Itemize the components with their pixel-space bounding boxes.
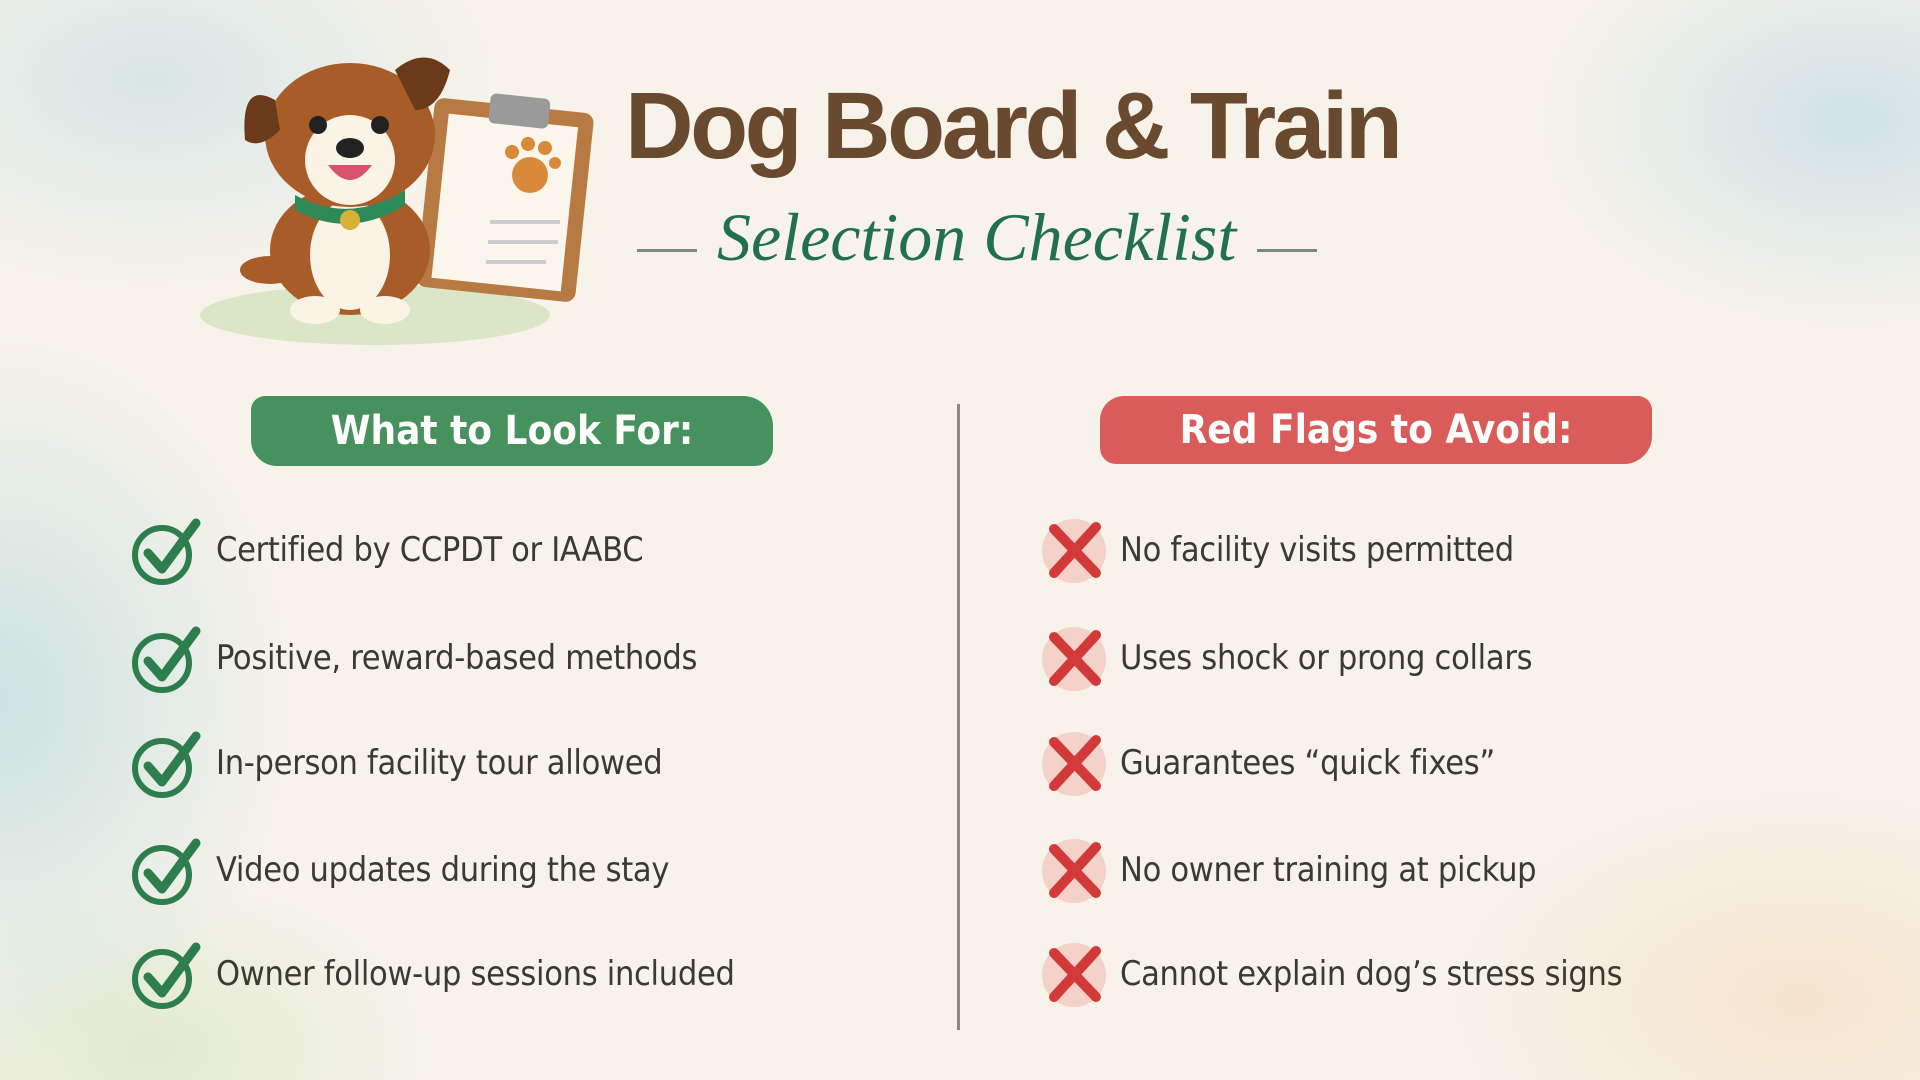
check item 5 [132, 942, 735, 1009]
check item 3 [132, 732, 662, 798]
x item 4 [1042, 839, 1536, 903]
x item 4: No owner training at pickup [1120, 850, 1536, 890]
x item 3 [1042, 732, 1495, 796]
red banner: Red Flags: Red Flags to Avoid: [1180, 407, 1572, 453]
dog illustration [200, 58, 594, 345]
check item 4 [132, 838, 669, 905]
check item 3: In-person facility tour allowed [216, 743, 662, 783]
title: Dog Board & Train [625, 73, 1399, 179]
x item 5 [1042, 943, 1622, 1007]
check item 4: Video updates during the stay [216, 850, 669, 890]
x item 1 [1042, 519, 1514, 583]
divider [957, 404, 960, 1030]
green banner: What to Look For [251, 396, 773, 466]
x item 5: Cannot explain dog’s stress signs [1120, 954, 1622, 994]
check item 2 [132, 626, 697, 693]
list: red flags [1042, 519, 1622, 1007]
red banner: Red Flags [1100, 396, 1652, 464]
x item 2: Uses shock or prong collars [1120, 638, 1532, 678]
check item 2: Positive, reward-based methods [216, 638, 697, 678]
check item 5: Owner follow-up sessions included [216, 954, 735, 994]
subtitle: Selection Checklist [717, 199, 1236, 275]
x item 3: Guarantees “quick fixes” [1120, 743, 1495, 783]
check item 1 [132, 518, 643, 585]
x item 2 [1042, 627, 1532, 691]
x item 1: No facility visits permitted [1120, 530, 1514, 570]
check item 1: Certified by CCPDT or IAABC [216, 530, 643, 570]
green banner: What to Look For: What to Look For: [331, 408, 693, 454]
list: what to look for [132, 518, 735, 1009]
